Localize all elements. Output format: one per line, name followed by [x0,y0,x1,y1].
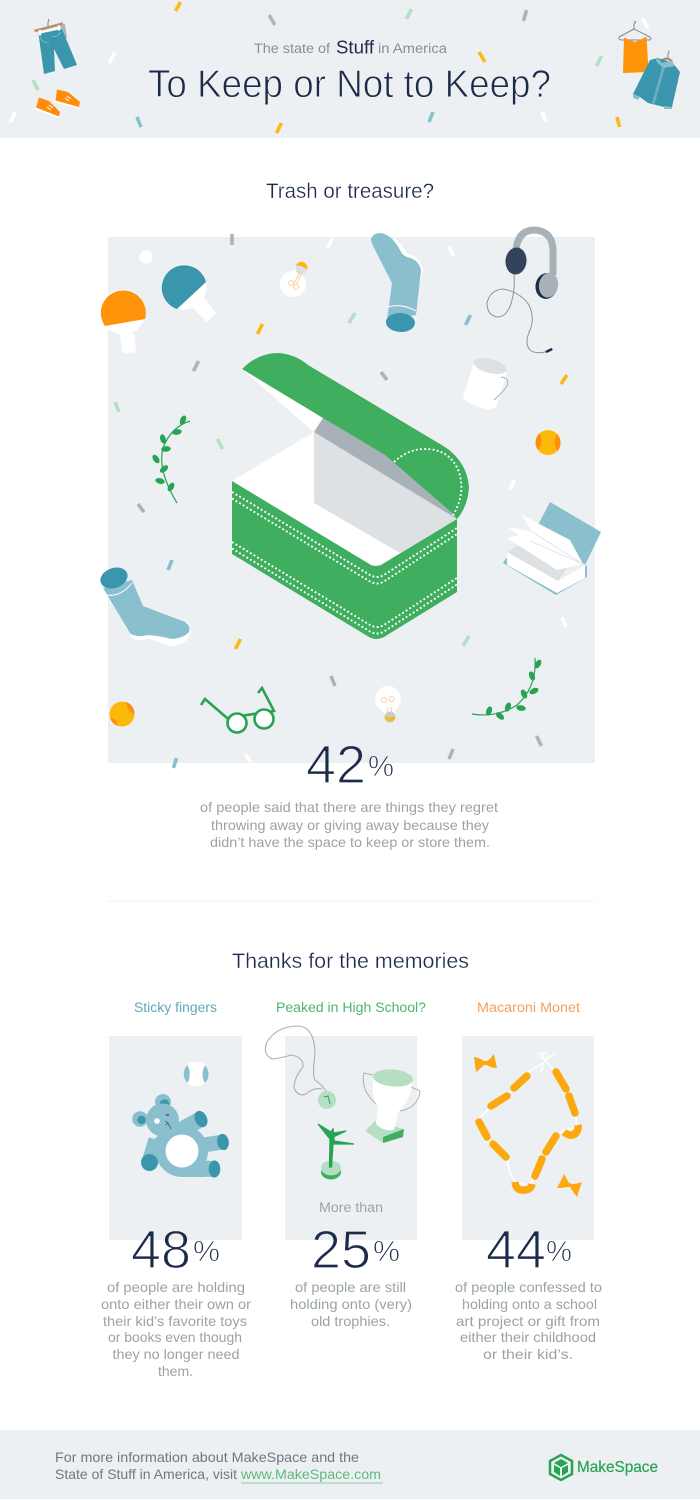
icon: open book [503,502,601,595]
icon: medal on lanyard [265,1026,336,1109]
text: more information: For more information about MakeSpace and the [55,1449,359,1465]
text: regret statistic: didn’t have the space to keep or store them. [210,834,490,850]
chest floor [232,432,400,566]
column heading: macaroni monet: Macaroni Monet [477,1000,580,1015]
icon: bowtie pasta top [474,1054,497,1072]
icon: dancer trophy [318,1124,354,1180]
text: art project statistic: either their childhood [460,1329,596,1345]
panel: trash or treasure illustration [97,230,601,768]
stat: 44 percent [486,1220,572,1280]
header confetti [10,2,648,133]
icon: orange sneakers [35,90,80,118]
text: trophies statistic: holding onto (very) [290,1296,412,1312]
icon: light bulb bottom [375,686,401,722]
text: art project statistic: holding onto a school [462,1296,597,1312]
icon: trophy cup [363,1068,420,1143]
icon: bowtie pasta bottom [557,1174,582,1197]
stat: 25 percent: % [373,1236,400,1268]
title: To Keep or Not to Keep? [148,63,551,106]
icon: yellow ball bottom [110,702,135,726]
stat: 44 percent: 44 [486,1220,546,1280]
text: regret statistic [200,799,498,850]
section heading: thanks for the memories: Thanks for the memories [232,950,469,973]
header band [0,0,700,138]
lid inner white [242,369,323,432]
column heading: peaked in high school: Peaked in High School? [276,1000,426,1015]
subtitle: Stuff [336,38,375,58]
icon: treasure chest [232,353,469,639]
subtitle: The state of [254,41,330,56]
chest inner wall [314,432,457,553]
stat: 44 percent: % [546,1236,572,1268]
icon: orange ping pong paddle [100,290,146,354]
stat: 48 percent: 48 [131,1220,191,1280]
text: toys statistic: or books even though [108,1329,242,1345]
text: toys statistic: their kid’s favorite toys [103,1313,247,1329]
stat: 25 percent: 25 [311,1220,371,1280]
text: art project statistic [455,1279,602,1362]
icon: teal ping pong paddle [162,264,216,322]
subtitle: in America [378,41,448,56]
text: trophies statistic: of people are still [295,1279,406,1295]
text: more information: www.MakeSpace.com [240,1466,381,1482]
icon: yellow ball [536,430,561,455]
panel: peaked in high school [265,1026,420,1240]
text: trophies statistic [290,1279,412,1329]
logo: MakeSpace [550,1455,658,1480]
stat: 48 percent [131,1220,220,1280]
stitching [232,449,461,634]
text: toys statistic: of people are holding [107,1279,245,1295]
text: toys statistic: them. [158,1363,193,1379]
icon: teddy bear [132,1094,230,1178]
icon: green glasses [201,688,274,732]
text: regret statistic: of people said that there are things they regret [200,799,498,815]
subtitle [254,38,448,58]
lid inner shadow [314,418,457,519]
section heading: trash or treasure: Trash or treasure? [266,180,434,203]
panel: macaroni monet [462,1036,594,1240]
text: art project statistic: or their kid’s. [483,1346,573,1362]
text: art project statistic: of people confessed to [455,1279,602,1295]
icon: white mug [463,355,508,409]
panel: footer [0,1430,700,1499]
stat: 42 percent: 42 [306,735,366,795]
lid [242,353,469,519]
panel: sticky fingers [109,1036,242,1240]
chest front [232,481,457,639]
icon: jeans on hanger [34,19,77,74]
stat: 42 percent [306,735,394,795]
text: toys statistic [101,1279,251,1379]
icon: orange tank top on hanger [619,21,651,73]
icon: baseball [184,1062,209,1086]
stat: 48 percent: % [193,1236,220,1268]
icon: macaroni necklace [479,1053,578,1190]
stat: 25 percent [311,1220,400,1280]
icon: green vine right [472,658,543,721]
icon: white dot [140,250,152,264]
text: art project statistic: art project or gift from [456,1313,600,1329]
icon: green vine left [151,414,190,503]
confetti [115,234,567,768]
text: regret statistic: throwing away or giving away because they [211,817,489,833]
stat: 42 percent: % [368,751,394,783]
icon: denim shirt on hanger [633,51,680,109]
icon: headphones [487,230,560,353]
text: trophies statistic: old trophies. [311,1313,390,1329]
text: toys statistic: onto either their own or [101,1296,251,1312]
icon: blue sock bottom [97,564,191,646]
icon: blue sock top [371,233,423,333]
logo: MakeSpace: MakeSpace [577,1459,658,1476]
text: toys statistic: they no longer need [112,1346,240,1362]
icon: light bulb [280,262,307,297]
text: more than: More than [319,1200,383,1215]
text: more information [55,1449,383,1483]
text: more information: State of Stuff in America, visit [55,1466,237,1482]
column heading: sticky fingers: Sticky fingers [134,1000,217,1015]
